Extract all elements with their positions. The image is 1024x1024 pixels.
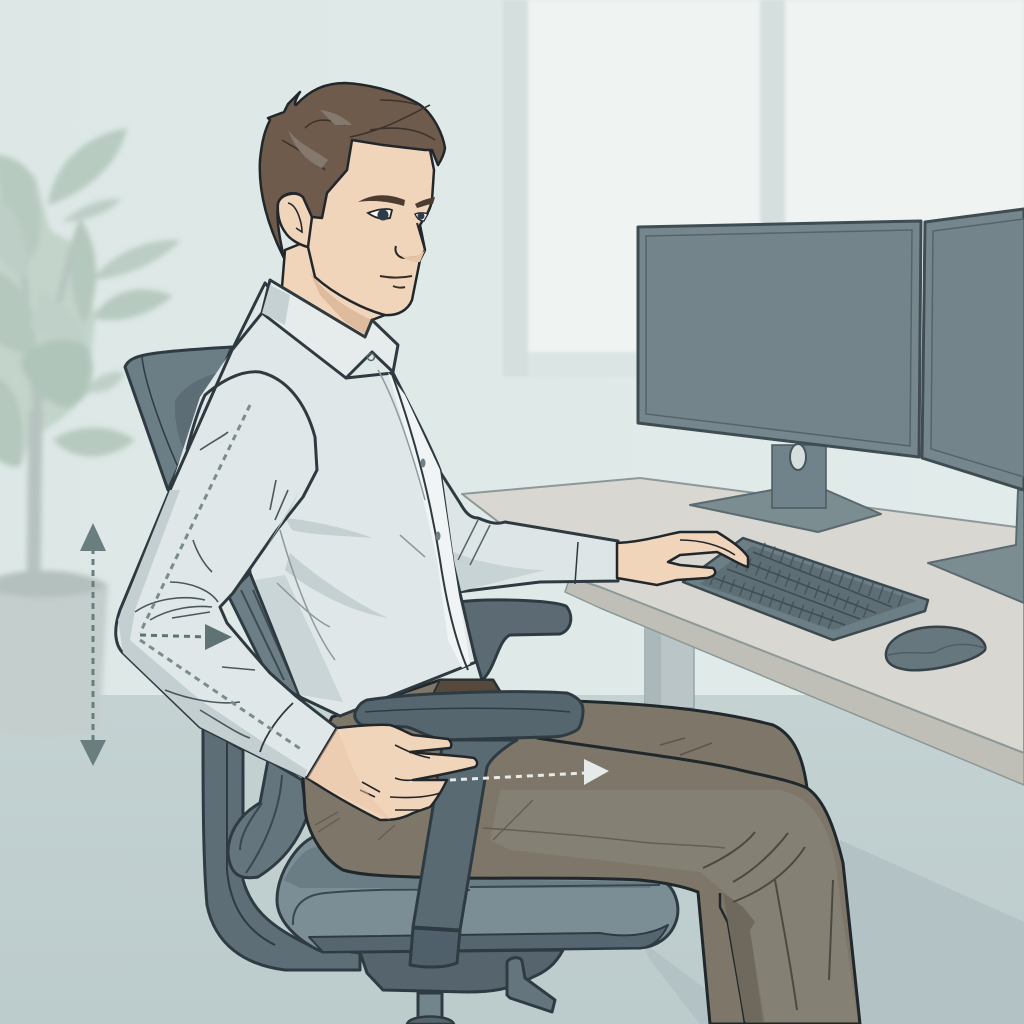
- desk edge band: [565, 577, 1024, 785]
- desk top: [462, 478, 1024, 753]
- chair: far armrest: [458, 600, 571, 680]
- nose: [395, 223, 425, 258]
- arrow: thigh horizontal: [450, 759, 609, 785]
- monitor: left: [638, 221, 921, 532]
- eyebrows: [358, 195, 405, 206]
- trousers: fold lines: [537, 738, 807, 788]
- ear: [278, 194, 312, 247]
- shirt: far sleeve: [437, 467, 618, 592]
- eyes: [368, 209, 392, 219]
- plant stems: [20, 220, 80, 416]
- desk leg: [645, 625, 694, 708]
- desk: [462, 478, 1024, 785]
- chair: base: [360, 950, 563, 992]
- sleeve shading: [118, 490, 307, 778]
- chair: [125, 347, 571, 1024]
- trousers: [303, 680, 860, 1024]
- belt: [430, 680, 500, 700]
- monitor: right: [922, 209, 1024, 603]
- background wall: [0, 0, 1024, 700]
- chair: lumbar support: [228, 760, 307, 878]
- plant pot: [0, 580, 108, 736]
- shirt collar: [262, 280, 398, 378]
- plant foliage mass: [0, 160, 95, 468]
- keyboard: [683, 538, 928, 640]
- trousers: lit patch: [490, 790, 858, 1022]
- chair: back frame: [203, 727, 360, 970]
- mouse: [886, 627, 985, 670]
- shirt: shading: [255, 575, 343, 702]
- chair: near armrest pad: [355, 692, 583, 740]
- floor: [0, 695, 1024, 1024]
- head: [260, 83, 445, 315]
- chair: near armrest post: [410, 740, 517, 967]
- neck: [282, 240, 385, 337]
- shirt: near sleeve: [115, 313, 337, 778]
- background plant: [0, 128, 181, 736]
- hand: far on keyboard: [617, 532, 748, 585]
- shirt: torso: [232, 283, 476, 716]
- chair: back mesh strip: [228, 573, 305, 700]
- hand: near holding armrest: [307, 725, 477, 820]
- cuff seam and wrinkles: [260, 703, 293, 752]
- arrow: upper arm line: [140, 405, 250, 633]
- chair: headrest and upper back: [125, 347, 232, 490]
- chair seat cushion: [277, 836, 678, 952]
- arrow: elbow horizontal: [140, 624, 232, 650]
- hair: [260, 83, 445, 258]
- window: [503, 0, 1024, 377]
- arrow: forearm line: [140, 640, 302, 750]
- plant leaves: [48, 128, 127, 206]
- arrow: vertical height range: [80, 523, 106, 766]
- mouth: [380, 276, 412, 288]
